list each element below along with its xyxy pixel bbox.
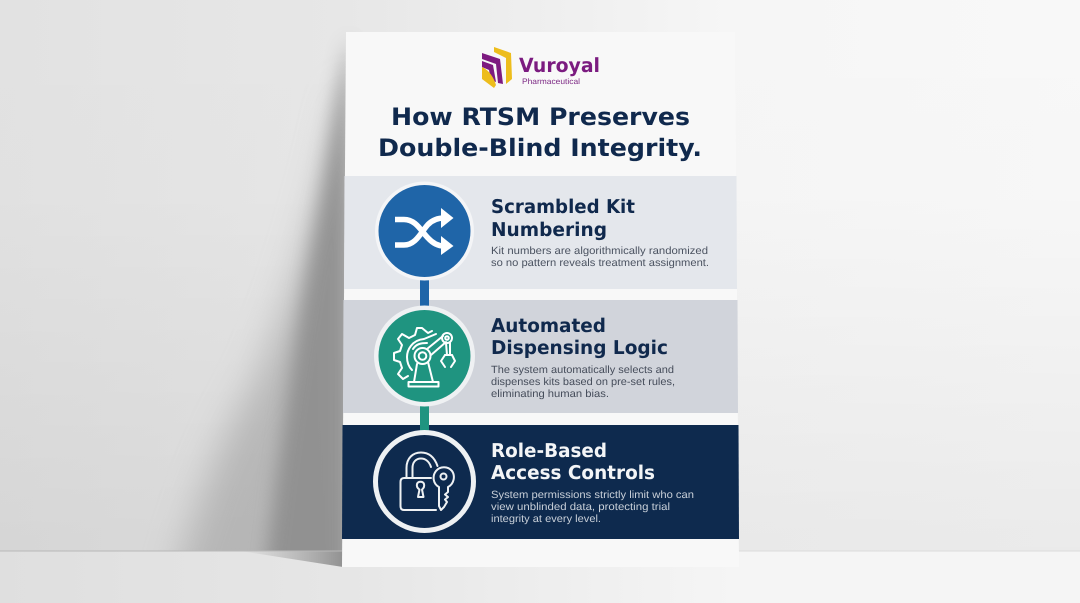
heading: automated dispensing logic <box>491 315 668 359</box>
text: role-based access description: view unblinded data, protecting trial <box>491 501 670 513</box>
title: How RTSM Preserves <box>391 103 690 131</box>
logo mark <box>482 47 512 88</box>
heading: scrambled kit numbering: Numbering <box>491 219 607 241</box>
connector: teal <box>420 405 429 433</box>
text: scrambled kit description: Kit numbers are algorithmically randomized <box>491 245 708 257</box>
connector: blue <box>420 276 429 307</box>
poster sheet <box>342 32 739 567</box>
floor line left <box>0 550 342 552</box>
heading: role-based access controls: Access Controls <box>491 462 655 484</box>
heading: scrambled kit numbering <box>491 196 635 241</box>
floor line right <box>739 550 1080 552</box>
icon: padlock and key <box>376 432 474 530</box>
panel: role-based access controls <box>342 425 739 539</box>
text: automated dispensing description: The system automatically selects and <box>491 364 674 376</box>
text: scrambled kit description <box>491 245 709 269</box>
heading: automated dispensing logic: Automated <box>491 315 606 337</box>
logo <box>482 47 600 88</box>
panel: scrambled kit numbering <box>344 176 737 289</box>
title <box>378 103 702 162</box>
text: role-based access description: integrity at every level. <box>491 513 601 525</box>
icon: gear and robot arm <box>374 306 475 406</box>
text: automated dispensing description <box>491 364 675 400</box>
icon: shuffle <box>375 182 474 280</box>
heading: scrambled kit numbering: Scrambled Kit <box>491 196 635 218</box>
heading: role-based access controls: Role-Based <box>491 440 607 462</box>
floor background <box>0 551 1080 603</box>
heading: automated dispensing logic: Dispensing Logic <box>491 337 668 359</box>
text: automated dispensing description: eliminating human bias. <box>491 388 609 400</box>
poster shadow on floor <box>240 551 343 567</box>
logo subtitle: Pharmaceutical <box>522 77 580 86</box>
title: Double-Blind Integrity. <box>378 134 702 162</box>
poster shadow on wall <box>170 46 346 551</box>
heading: role-based access controls <box>491 440 655 484</box>
logo wordmark: Vuroyal <box>519 54 600 77</box>
panel: automated dispensing logic <box>343 300 738 413</box>
text: role-based access description <box>491 489 694 525</box>
text: automated dispensing description: dispenses kits based on pre-set rules, <box>491 376 675 388</box>
text: role-based access description: System permissions strictly limit who can <box>491 489 694 501</box>
text: scrambled kit description: so no pattern reveals treatment assignment. <box>491 257 709 269</box>
